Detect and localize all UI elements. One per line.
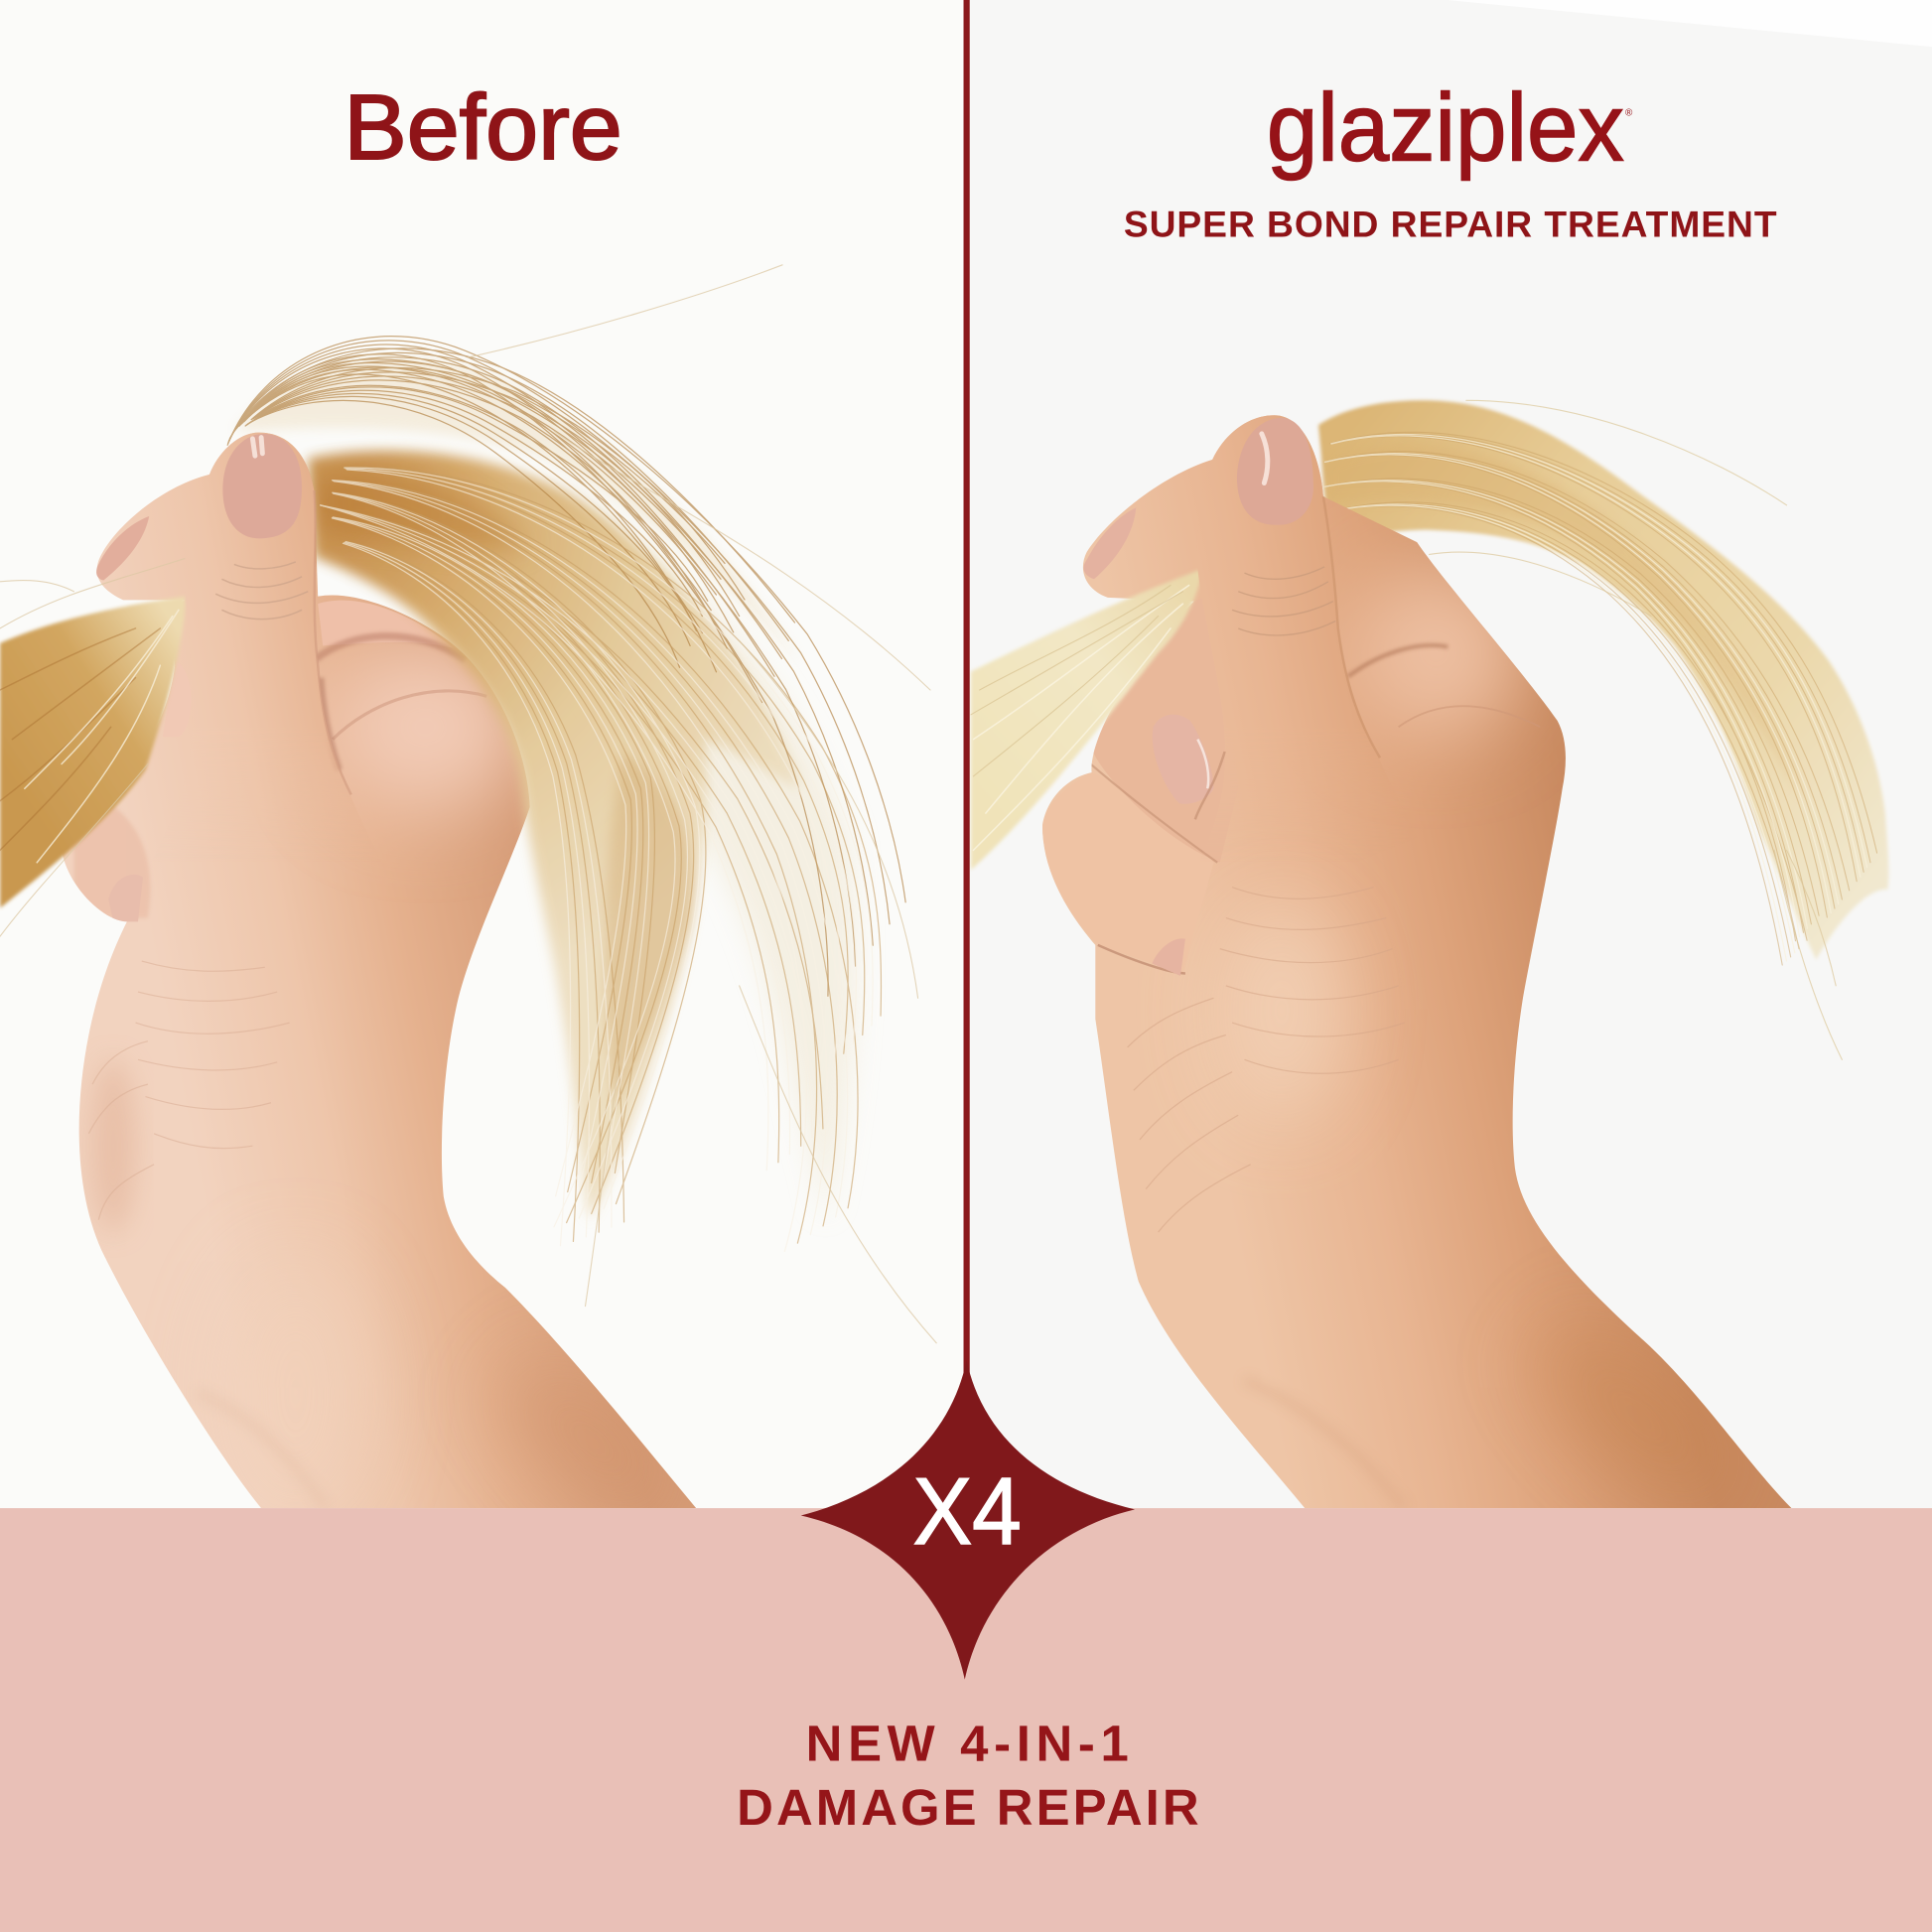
left hair pale halo [542,481,856,1220]
left hair tail [0,597,185,908]
logo: glaziplex: glaziplex [1267,72,1624,181]
right hair tail strands [971,586,1189,850]
right middle fingernail [1153,715,1213,804]
background: after panel [967,0,1932,1511]
footer text [737,1715,1199,1836]
right hand and arm [1035,407,1799,1536]
x4 star badge [801,1360,1135,1680]
vertical divider [964,0,970,1392]
footer text: NEW 4-IN-1 [806,1715,1129,1771]
right thumb [1193,415,1381,820]
background: white corner wedge [1448,0,1932,47]
right hair tail [971,569,1201,870]
left thumb [185,433,352,795]
background: before panel [0,0,967,1511]
subheading: super bond repair treatment: SUPER BOND REPAIR TREATMENT [1124,203,1777,244]
heading: before: Before [344,75,622,179]
right thumbnail [1237,418,1313,525]
left hair mass [308,451,801,1220]
left hair strands [0,265,936,1343]
photo: after hand with healthy hair [971,400,1888,1536]
left hair lower streak [606,752,693,1109]
x4 label: X4 [913,1458,1022,1565]
right hair strands [1309,400,1878,1059]
footer text: DAMAGE REPAIR [737,1779,1199,1836]
left thumbnail [222,434,302,538]
left hand and arm [63,433,696,1508]
right hair behind fingers [1318,400,1888,960]
photo: before hand with damaged hair [0,265,936,1553]
right hair golden core [1324,445,1805,801]
left index fingernail [96,516,149,581]
right index fingernail [1083,507,1136,579]
pink footer band [0,1508,1932,1932]
left hair golden core [318,470,530,549]
right curled fingers [1042,829,1050,870]
left hair top veil [234,357,801,665]
registered mark: ® [1625,108,1633,119]
